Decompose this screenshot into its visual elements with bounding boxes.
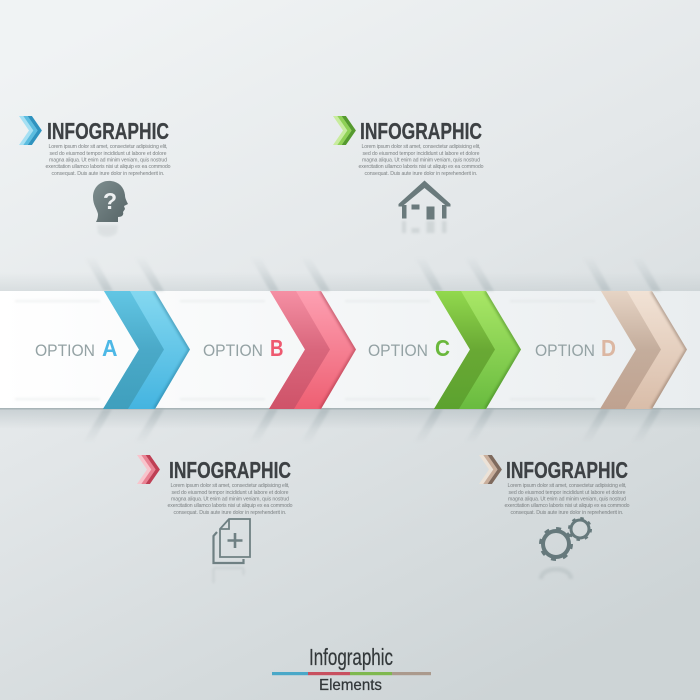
footer subtitle: Elements <box>319 677 382 694</box>
icon: documents with plus <box>214 519 250 583</box>
icon: head with question mark <box>93 181 128 237</box>
text block: top left: magna aliqua. Ut enim ad minim veniam, quis nostrud <box>49 158 167 164</box>
text block: bottom left: Lorem ipsum dolor sit amet, consectetur adipisicing elit, <box>170 483 290 489</box>
label: option C: C <box>435 335 450 361</box>
text block: bottom left: consequat. Duis aute irure dolor in reprehenderit in. <box>174 510 286 516</box>
icon: head with question mark: ? <box>103 188 117 214</box>
text block: top right: magna aliqua. Ut enim ad minim veniam, quis nostrud <box>362 158 480 164</box>
heading: top right: INFOGRAPHIC <box>360 118 482 144</box>
text block: top left <box>46 144 171 177</box>
text block: bottom right: sed do eiusmod tempor incididunt ut labore et dolore <box>508 490 626 496</box>
icon: green small chevrons <box>333 116 356 145</box>
text block: top right <box>358 144 484 177</box>
text block: bottom left <box>168 483 293 516</box>
label: option C: OPTION <box>368 342 428 360</box>
chevron D <box>600 291 687 409</box>
icon: house <box>398 180 450 233</box>
icon: blue small chevrons <box>19 116 42 145</box>
text block: top right: Lorem ipsum dolor sit amet, consectetur adipisicing elit, <box>362 144 480 150</box>
text block: top left: exercitation ullamco laboris nisi ut aliquip ex ea commodo <box>46 164 171 170</box>
label: option B <box>203 335 284 361</box>
label: option D <box>535 335 616 361</box>
slit shadows <box>83 258 661 442</box>
footer colour rule <box>272 672 431 675</box>
band shadows above and below <box>0 272 700 429</box>
label: option A: A <box>102 335 118 361</box>
chevron A <box>103 291 190 409</box>
heading: top left: INFOGRAPHIC <box>47 118 169 144</box>
text block: bottom right: Lorem ipsum dolor sit amet, consectetur adipisicing elit, <box>508 483 626 489</box>
text block: bottom right: exercitation ullamco laboris nisi ut aliquip ex ea commodo <box>504 503 630 509</box>
text block: bottom right: consequat. Duis aute irure dolor in reprehenderit in. <box>510 510 624 516</box>
text block: bottom left: exercitation ullamco laboris nisi ut aliquip ex ea commodo <box>168 503 293 509</box>
chevron B <box>269 291 356 409</box>
label: option B: B <box>270 335 284 361</box>
text block: bottom left: magna aliqua. Ut enim ad minim veniam, quis nostrud <box>171 496 289 502</box>
icon: tan small chevrons <box>479 455 502 484</box>
text block: bottom right: magna aliqua. Ut enim ad minim veniam, quis nostrud <box>508 496 626 502</box>
label: option A <box>35 335 118 361</box>
text block: top left: Lorem ipsum dolor sit amet, consectetur adipisicing elit, <box>48 144 168 150</box>
icon: gears <box>540 518 591 579</box>
icon: red small chevrons <box>137 455 160 484</box>
text block: bottom right <box>504 483 630 516</box>
label: option D: OPTION <box>535 342 595 360</box>
label: option B: OPTION <box>203 342 263 360</box>
text block: top right: sed do eiusmod tempor incididunt ut labore et dolore <box>362 151 480 157</box>
label: option D: D <box>601 335 616 361</box>
heading: bottom right: INFOGRAPHIC <box>506 457 628 483</box>
text block: bottom left: sed do eiusmod tempor incididunt ut labore et dolore <box>172 490 289 496</box>
text block: top right: exercitation ullamco laboris nisi ut aliquip ex ea commodo <box>358 164 484 170</box>
chevron C <box>434 291 521 409</box>
footer title: Infographic <box>309 644 393 670</box>
chevron band <box>0 291 700 410</box>
text block: top left: consequat. Duis aute irure dolor in reprehenderit in. <box>52 171 164 177</box>
text block: top right: consequat. Duis aute irure dolor in reprehenderit in. <box>364 171 478 177</box>
text block: top left: sed do eiusmod tempor incididunt ut labore et dolore <box>50 151 167 157</box>
label: option A: OPTION <box>35 342 95 360</box>
heading: bottom left: INFOGRAPHIC <box>169 457 291 483</box>
label: option C <box>368 335 450 361</box>
